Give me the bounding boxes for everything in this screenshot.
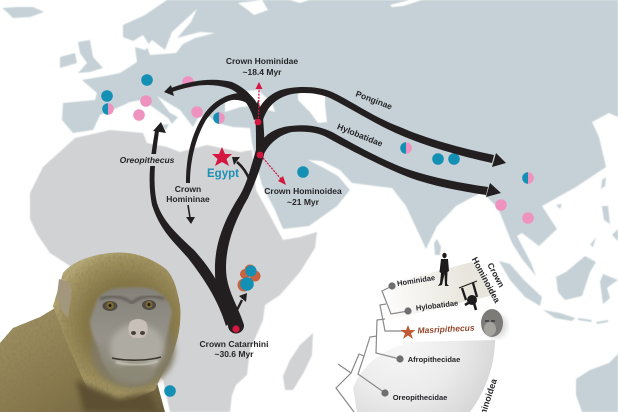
panel: Hominoidea grey band [353,340,495,412]
node Hominidae [388,282,396,290]
label Crown Homininae: Crown [175,184,201,194]
label Crown Catarrhini: ~30.6 Myr [214,349,254,359]
arrow: Hominidae to Europe [164,80,262,120]
panel: Crown Hominoidea band [388,262,494,320]
Eurasia landmass [62,0,618,276]
fossil site dots [101,74,534,397]
dot Greece pink [191,106,203,118]
label Crown Homininae: Homininae [166,194,210,204]
label Afropithecidae: Afropithecidae [408,355,460,364]
dashed arrow up [256,82,262,118]
face [90,287,172,387]
body [0,305,165,412]
arrow: Ponginae [255,87,506,167]
node Oreopithecidae [381,389,389,397]
brow [100,296,164,303]
label Hominidae: Hominidae [396,273,436,288]
mouth [112,357,161,360]
muzzle [110,324,164,372]
panel: white backing [330,258,500,412]
label Oreopithecus with backing: Oreopithecus [120,155,175,165]
icon: human silhouette [438,253,449,286]
node Crown Hominidae [255,119,261,125]
label Masripithecus: Masripithecus [417,322,475,335]
ear [57,279,72,318]
icon: red star Egypt [212,147,232,166]
dot Arabia blue [297,166,309,178]
Java [543,310,575,321]
icon: orange star Masripithecus [400,325,416,339]
label Ponginae: Ponginae [354,88,394,112]
node Crown Hominoidea [257,152,263,158]
Australia [576,354,618,412]
Iceland [2,7,44,18]
node Afropithecidae [396,355,404,363]
half dot Turkey [213,112,225,124]
dot Thailand pink [522,212,534,224]
half dot China [522,172,534,184]
Arctic seas [238,0,422,15]
label Egypt: Egypt [207,168,239,180]
dashed arrow down right [263,158,286,185]
Philippines [590,206,618,247]
label Crown Hominoidea: Crown Hominoidea [264,186,342,196]
label Crown Hominoidea: ~21 Myr [287,197,320,207]
red divergence nodes and dashed arrows [232,82,286,333]
arrow: to East Africa [236,293,247,312]
label Crown Hominidae: ~18.4 Myr [242,67,282,77]
dot India blue [432,153,444,165]
dispersal arrows [150,80,506,334]
neck shadow [76,380,158,412]
Africa landmass [30,130,317,412]
label Crown Catarrhini: Crown Catarrhini [200,339,268,349]
Great Britain [78,40,103,73]
Sulawesi [600,274,618,304]
lower face fur [91,312,175,388]
Caspian Sea [298,88,327,123]
left eye [102,301,118,311]
icon: gibbon silhouette [459,281,477,310]
phylogenetic tree panel [330,253,507,412]
half dot Pakistan [400,142,412,154]
arrow: Oreopithecus branch [150,122,232,326]
Ireland [60,53,77,68]
label Crown Hominidae: Crown Hominidae [226,56,298,66]
dot Myanmar pink [495,199,507,211]
label Hylobatidae tree: Hylobatidae [415,298,459,313]
chin [116,362,156,382]
arrow: to Egypt [232,157,250,181]
Madagascar [283,333,313,390]
Baltic Sea [147,9,215,55]
tree branches [336,286,408,412]
dot South Africa blue [164,385,176,397]
dot Hungary pink [182,76,194,88]
Borneo [556,256,596,300]
Sumatra [499,261,542,306]
Lesser Sunda islands [578,318,608,324]
dot Central Europe blue [141,74,153,86]
Black Sea [225,90,275,112]
Sri Lanka [434,239,441,255]
icon: Masripithecus skull [481,309,507,338]
lower lip [116,361,158,365]
half dot Spain [102,103,114,115]
Sicily and Sardinia [137,110,169,130]
node Hylobatidae [404,307,412,315]
dot India blue second [448,153,460,165]
arrow: Homininae down [186,205,195,224]
illustration: Masripithecus reconstruction [0,252,180,412]
label Hylobatidae: Hylobatidae [336,121,384,149]
label Crown rotated: Crown [485,261,507,289]
label Hominoidea rotated: Hominoidea [470,255,502,305]
nose [128,319,148,338]
node Crown Catarrhini [232,325,240,333]
label Oreopithecidae: Oreopithecidae [393,393,447,402]
arrow: Crown Homininae [186,93,260,183]
dot Italy pink [140,95,152,107]
Taiwan and Hainan [556,177,606,209]
arrow: Hylobatidae [256,125,501,197]
head fur [53,252,180,405]
dot Spain blue [101,90,113,102]
East Africa fossil cluster [238,264,260,292]
dot Mediterranean pink [133,109,145,121]
arrow: main trunk [215,100,264,334]
right eye [142,300,156,310]
